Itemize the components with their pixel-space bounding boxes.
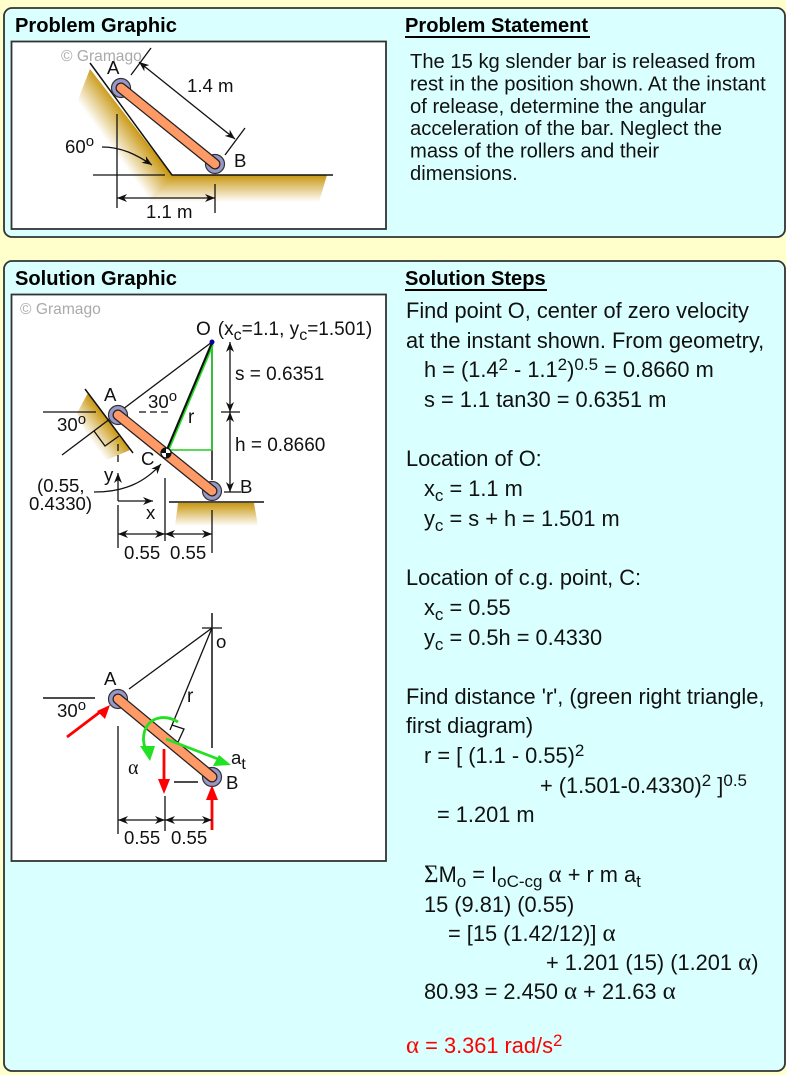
labels: C [141, 448, 154, 469]
text: problem statement: The 15 kg slender bar is released from [410, 51, 756, 73]
step: location of C: Location of c.g. point, C: [406, 565, 641, 590]
dimensions 0.55 [118, 726, 212, 848]
centroid marker C [161, 448, 171, 458]
step: location of O: = s + h = 1.501 m [443, 506, 620, 531]
step: location of O: Location of O: [406, 446, 542, 471]
labels [57, 631, 246, 793]
labels A and B: B [234, 150, 246, 171]
labels: o [78, 411, 86, 428]
inclined wall [76, 63, 333, 202]
step: moment equation: 80.93 = 2.450 α + 21.63 α [424, 978, 676, 1005]
step: location of O: = 1.1 m [443, 476, 523, 501]
callout: C coordinates: 0.4330) [29, 493, 92, 514]
labels: 30 [57, 414, 78, 435]
labels: 30 [57, 700, 78, 721]
step: moment equation: α + r m a [549, 861, 636, 888]
step: find r: = 1.201 m [437, 802, 535, 827]
step: find point O: ) [567, 357, 574, 382]
watermark: © Gramago [20, 301, 101, 318]
step: find point O: 0.5 [574, 355, 598, 374]
step: find r: + (1.501-0.4330) [540, 773, 702, 798]
step: location of C: = 0.55 [443, 595, 511, 620]
dimension s and h [221, 342, 325, 492]
step: location of O [406, 446, 620, 535]
labels: B [240, 476, 252, 497]
step: find r: 2 [575, 741, 584, 760]
watermark: © Gramago [61, 48, 142, 65]
step: moment equation: 15 (9.81) (0.55) [424, 892, 574, 917]
label O coordinates: O (x [196, 319, 234, 340]
answer: α = 3.361 rad/s [406, 1032, 553, 1059]
step: location of O: c [435, 516, 444, 535]
dimensions 0.55: 0.55 [171, 827, 207, 848]
label O coordinates: c [234, 327, 242, 344]
labels [57, 384, 252, 497]
step: moment equation: + 1.201 (15) (1.201 α) [546, 949, 758, 976]
dimension 1.4 m: 1.4 m [187, 75, 234, 96]
labels: o [78, 697, 86, 714]
text: problem statement: mass of the rollers and their [410, 141, 659, 163]
step: find point O: at the instant shown. From geometry, [406, 328, 764, 353]
bar AB with rollers [112, 78, 224, 174]
labels: 30 [148, 391, 169, 412]
panel: solution [4, 261, 785, 1071]
heading: problem graphic: Problem Graphic [15, 15, 177, 37]
labels: r [187, 686, 194, 707]
green right triangle [167, 344, 213, 452]
dimensions 0.55: 0.55 [124, 827, 160, 848]
step: find r [406, 684, 764, 827]
first diagram: geometry [29, 319, 372, 563]
labels: B [226, 772, 238, 793]
heading: solution graphic: Solution Graphic [15, 268, 177, 290]
step: moment equation: o [457, 872, 466, 891]
angle 60 degrees [65, 114, 165, 208]
step: find point O: Find point O, center of zero velocity [406, 298, 749, 323]
step: find r: 2 [702, 771, 711, 790]
xy axes [104, 464, 156, 523]
step: location of O: x [424, 476, 435, 501]
text: problem statement: acceleration of the bar. Neglect the [410, 118, 722, 140]
bar AB with rollers [108, 690, 222, 786]
labels: A [104, 668, 117, 689]
step: moment equation: oC-cg [497, 872, 542, 891]
step: location of O: y [424, 506, 435, 531]
step: location of C: = 0.5h = 0.4330 [443, 625, 602, 650]
dimension 1.4 m [131, 48, 245, 155]
callout: C coordinates [29, 464, 161, 514]
point O [210, 340, 214, 344]
panel: problem [4, 8, 785, 237]
step: find point O: s = 1.1 tan30 = 0.6351 m [424, 387, 666, 412]
labels A and B: A [107, 57, 120, 78]
inclined wall [77, 389, 133, 463]
red reaction arrow at A [67, 705, 110, 737]
construction lines [43, 613, 222, 782]
labels: a [231, 747, 241, 768]
bar AB with rollers [108, 406, 222, 500]
label O coordinates: c [299, 327, 307, 344]
step: location of C: x [424, 595, 435, 620]
step: location of C: y [424, 625, 435, 650]
answer: 2 [553, 1031, 562, 1050]
step: find point O [406, 298, 764, 412]
dimension s and h: s = 0.6351 [235, 364, 324, 385]
red weight arrow [158, 749, 170, 794]
step: find point O: h = (1.4 [424, 357, 499, 382]
step: find r: first diagram) [406, 713, 533, 738]
step: find point O: 2 [499, 355, 508, 374]
step: find point O: - 1.1 [508, 357, 558, 382]
construction lines [43, 342, 212, 480]
text: solution steps [406, 298, 764, 1059]
label O coordinates: =1.501) [307, 319, 372, 340]
angle 60 degrees: o [86, 133, 94, 150]
text: problem statement: of release, determine the angular [410, 96, 707, 118]
text: problem statement: dimensions. [410, 163, 518, 185]
angle 60 degrees: 60 [65, 136, 86, 157]
labels: r [188, 407, 195, 428]
labels: α [128, 757, 139, 779]
diagram: problem graphic [12, 42, 386, 229]
green tangential acceleration arrow [166, 739, 231, 766]
step: location of O: c [435, 486, 444, 505]
step: location of C: c [435, 635, 444, 654]
heading: problem statement: Problem Statement [405, 15, 588, 37]
green angular acceleration arrow [140, 718, 178, 761]
labels: t [241, 756, 246, 773]
step: moment equation: t [636, 872, 641, 891]
step: moment equation [424, 861, 758, 1005]
label O coordinates: =1.1, y [242, 319, 300, 340]
dimension 1.1 m [117, 184, 215, 222]
step: find r: ] [711, 773, 723, 798]
callout: C coordinates: (0.55, [37, 475, 85, 496]
step: find r: Find distance 'r', (green right triangle, [406, 684, 764, 709]
labels: A [104, 384, 117, 405]
step: location of C: c [435, 605, 444, 624]
heading: solution steps: Solution Steps [405, 268, 546, 290]
xy axes: y [104, 464, 114, 485]
diagram: solution graphics box [12, 294, 386, 861]
dimension s and h: h = 0.8660 [235, 435, 325, 456]
step: find point O: 2 [558, 355, 567, 374]
step: find r: 0.5 [723, 771, 747, 790]
red reaction arrow at B [206, 785, 218, 830]
labels: o [216, 631, 226, 652]
xy axes: x [146, 502, 156, 523]
labels A and B [107, 57, 246, 171]
labels: o [169, 388, 177, 405]
step: moment equation: = I [466, 862, 497, 887]
step: moment equation: ΣM [424, 861, 457, 888]
ground [169, 502, 264, 526]
dimensions 0.55: 0.55 [124, 542, 160, 563]
dimensions 0.55: 0.55 [170, 542, 206, 563]
step: location of C [406, 565, 641, 654]
step: find point O: = 0.8660 m [598, 357, 714, 382]
text: problem statement: rest in the position shown. At the instant [410, 73, 766, 95]
step: find r: r = [ (1.1 - 0.55) [424, 743, 575, 768]
step: moment equation: = [15 (1.42/12)] α [448, 920, 616, 947]
dimension 1.1 m: 1.1 m [146, 201, 193, 222]
dimensions 0.55 [118, 478, 212, 563]
second diagram: forces [43, 613, 246, 848]
